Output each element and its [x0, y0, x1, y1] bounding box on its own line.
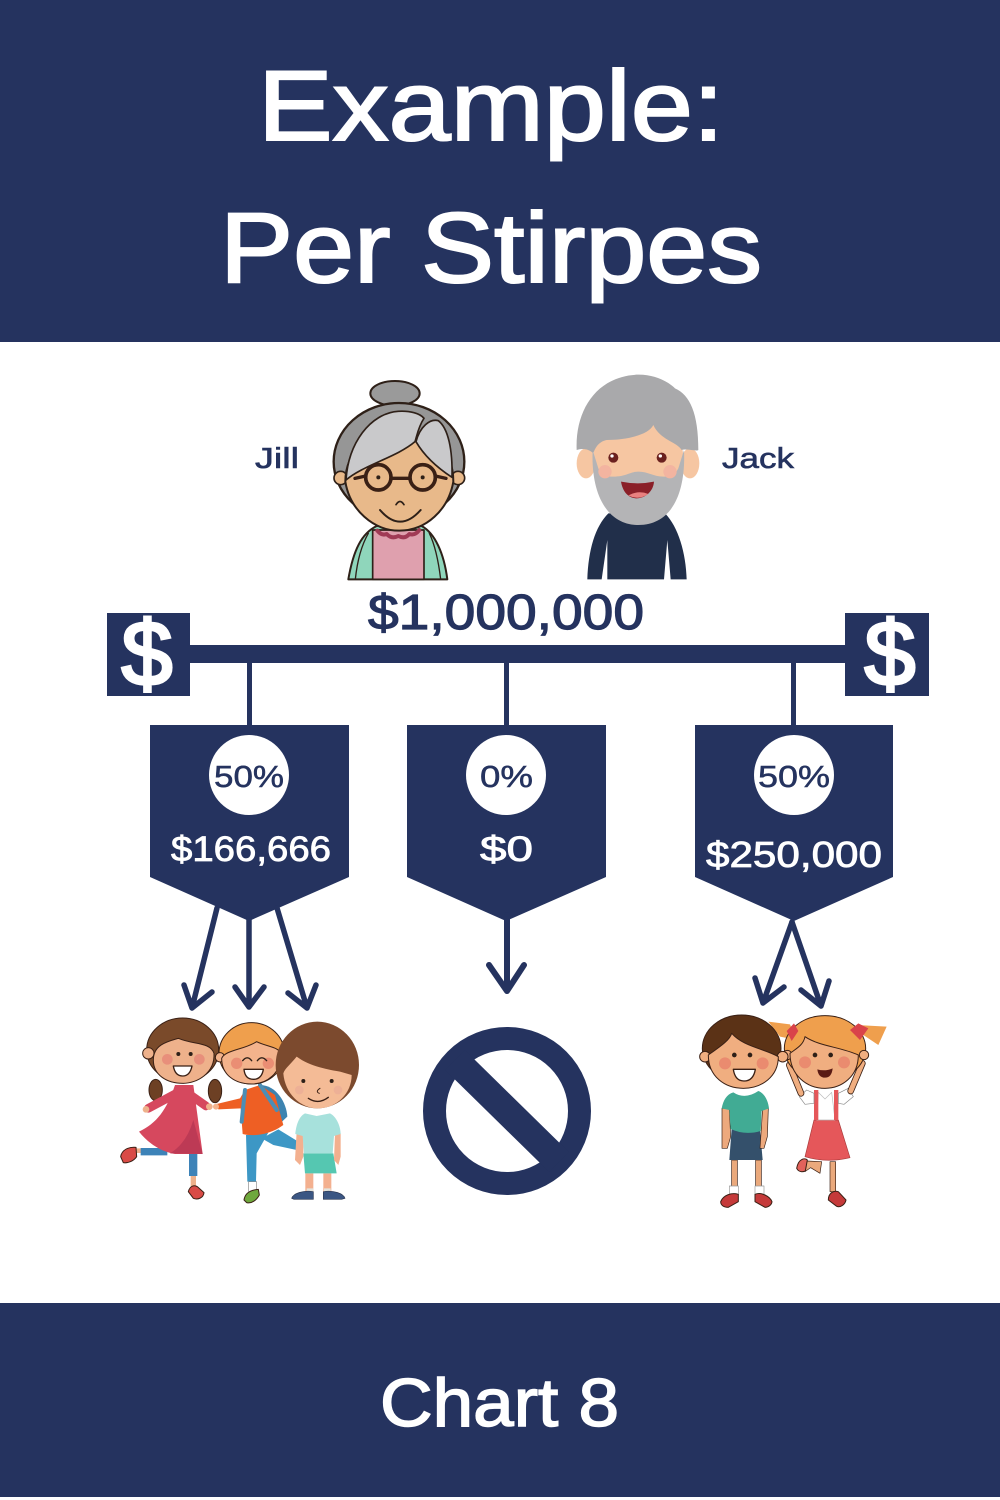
label: Jack: Jack — [722, 443, 795, 475]
arrows: three grandchildren — [184, 908, 316, 1008]
illustration: two grandchildren — [700, 1015, 887, 1207]
icon: dollar square left — [107, 603, 190, 705]
branch: left child share — [150, 663, 349, 921]
title: Example: Example: — [258, 50, 724, 161]
arrow: no heirs — [489, 915, 524, 991]
percent: 50: 50% — [214, 759, 284, 794]
illustration: grandfather Jack — [577, 375, 699, 579]
header panel — [0, 0, 1000, 342]
icon: prohibited sign — [434, 1038, 580, 1184]
footer label: Chart 8 — [380, 1365, 619, 1441]
icon: dollar square left: $ — [121, 603, 173, 705]
horizontal estate bar — [185, 645, 850, 663]
label: Jill: Jill — [255, 443, 299, 475]
icon: dollar square right: $ — [864, 603, 916, 705]
branch: middle child share — [407, 663, 606, 921]
illustration: grandmother Jill — [334, 381, 465, 579]
footer panel — [0, 1303, 1000, 1497]
amount: 166,666: $166,666 — [171, 830, 331, 869]
amount: 0: $0 — [480, 830, 533, 869]
icon: dollar square right — [845, 603, 929, 705]
percent: 0: 0% — [480, 759, 533, 794]
amount: 250,000: $250,000 — [706, 834, 882, 875]
percent: 50: 50% — [758, 759, 830, 794]
title: Per Stirpes: Per Stirpes — [220, 192, 762, 303]
arrows: two grandchildren — [755, 922, 829, 1006]
total amount: $1,000,000 — [368, 586, 644, 640]
branch: right child share — [695, 663, 893, 921]
illustration: three grandchildren — [121, 1018, 359, 1203]
